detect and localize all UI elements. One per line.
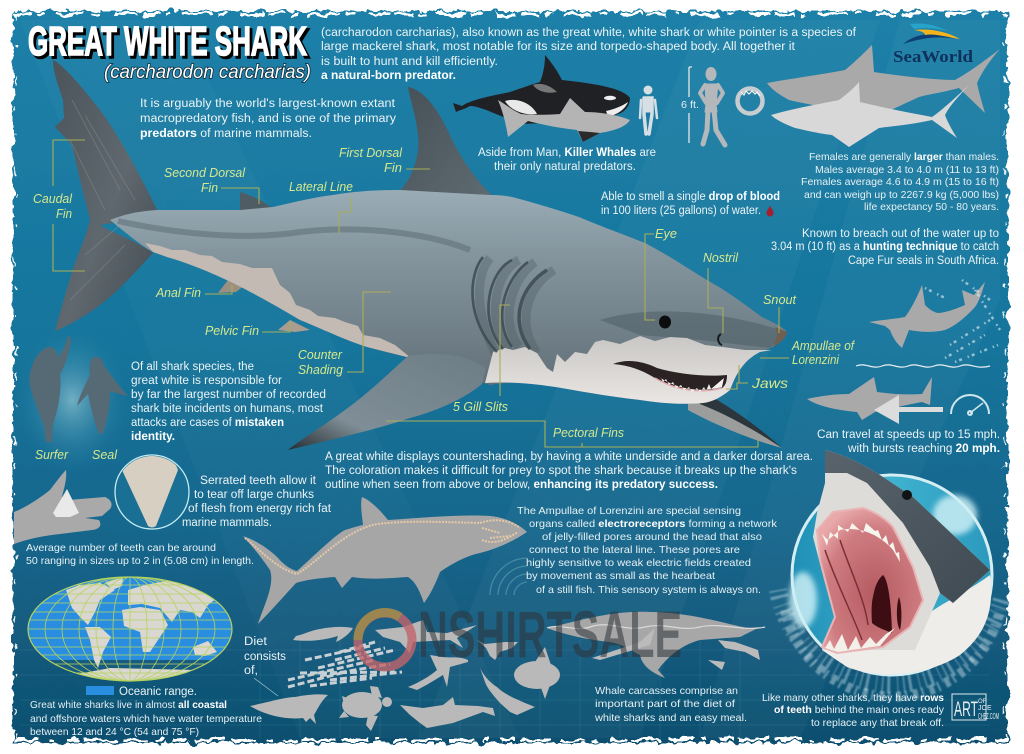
label: counter shading [298, 292, 391, 377]
mistaken identity text [131, 361, 326, 443]
range text [30, 699, 262, 738]
rows of teeth text [762, 692, 945, 729]
size text: Males average 3.4 to 4.0 m (11 to 13 ft) [815, 164, 999, 176]
artist logo: JOE [978, 705, 992, 712]
label: snout [763, 293, 797, 333]
label: jaws: Jaws [751, 375, 788, 391]
label: eye [645, 227, 677, 320]
mistaken identity text: identity. [131, 431, 175, 443]
watermark [358, 597, 682, 671]
whale text: Whale carcasses comprise an [595, 685, 738, 697]
artist logo: OF [978, 699, 987, 705]
label: pectoral fins [386, 421, 758, 447]
ampullae text: highly sensitive to weak electric fields created [526, 557, 751, 569]
lower teeth [825, 628, 895, 652]
label: snout: Snout [763, 293, 797, 307]
size text: Females average 4.6 to 4.9 m (15 to 16 ft) [801, 176, 999, 188]
killer whales text: Aside from Man, Killer Whales are [478, 147, 656, 159]
label: nostril [703, 251, 739, 333]
blood smell text: Able to smell a single drop of blood [601, 191, 780, 203]
teeth count text: 50 ranging in sizes up to 2 in (5.08 cm) in length. [26, 555, 254, 567]
label: first dorsal fin [339, 146, 430, 175]
label: second dorsal fin [164, 166, 259, 204]
diet text: consists [244, 651, 286, 663]
gill slits [472, 257, 547, 352]
mouth interior [817, 508, 923, 653]
mistaken identity text: great white is responsible for [131, 375, 282, 387]
map grid [20, 577, 240, 681]
teeth count text [26, 542, 254, 567]
intro text [321, 27, 857, 82]
sea lion right [480, 668, 535, 715]
label: ampullae of lorenzini: Lorenzini [792, 353, 840, 367]
world map [20, 577, 240, 684]
lateral line shadow [118, 221, 470, 250]
label: anal fin: Anal Fin [155, 286, 201, 300]
label: ampullae of lorenzini [760, 339, 855, 367]
artist logo: ART [954, 698, 978, 721]
label: eye: Eye [655, 227, 677, 241]
range text: Great white sharks live in almost all coastal [30, 699, 227, 711]
speed text [817, 429, 1000, 455]
icon: large person [700, 67, 725, 145]
whale text: white sharks and an easy meal. [594, 712, 747, 724]
turtle [339, 686, 392, 731]
diet text [244, 636, 286, 696]
ampullae text: organs called electroreceptors forming a network [529, 518, 778, 530]
label: first dorsal fin: Fin [384, 161, 402, 175]
rows of teeth text: of teeth behind the main ones ready [774, 704, 945, 716]
icon: blood drop [766, 206, 774, 217]
speed shark icon [807, 377, 932, 420]
ampullae text [517, 505, 778, 596]
macropredatory text: predators of marine mammals. [140, 128, 312, 140]
shark in front of orca [498, 98, 630, 142]
comparison silhouette: gray shark [767, 45, 1000, 115]
size text: Females are generally larger than males. [809, 151, 999, 163]
serrated teeth text: Serrated teeth allow it [200, 475, 317, 487]
logo: SeaWorld: SeaWorld [893, 47, 974, 66]
icon: shark jaws [738, 88, 762, 114]
ampullae text: of jelly-filled pores around the head that also [542, 531, 762, 543]
watermark: NSHIRTSALE [418, 597, 682, 671]
range text: and offshore waters which have water temperature [30, 713, 262, 725]
orca and shark illustration [453, 55, 630, 142]
arrow [874, 395, 943, 424]
countershading text [325, 451, 813, 491]
breaching shark icon [856, 280, 1000, 367]
size text: life expectancy 50 - 80 years. [864, 201, 999, 213]
ampullae text: connect to the lateral line. These pores are [529, 544, 740, 556]
label: surfer and seal [35, 448, 118, 462]
label: counter shading: Counter [298, 348, 343, 362]
dugong [250, 694, 328, 724]
open-mouth shark illustration [778, 450, 1002, 697]
electric field arcs [490, 558, 527, 595]
labels: shark anatomy [33, 140, 855, 447]
serrated teeth text: to tear off large chunks [194, 489, 314, 501]
ampullae text: by movement as small as the hearbeat [526, 570, 715, 582]
mistaken identity text: shark bite incidents on humans, most [131, 403, 324, 415]
shark small [375, 620, 477, 653]
circle background [792, 475, 992, 675]
belly countershading [145, 243, 411, 358]
diet text: Diet [244, 636, 268, 648]
nostril [718, 334, 722, 345]
icon: hand holding tooth [14, 470, 112, 544]
splash inside circle [789, 495, 977, 628]
label: nostril: Nostril [703, 251, 739, 265]
label: first dorsal fin: First Dorsal [339, 146, 403, 160]
label: counter shading: Shading [298, 363, 343, 377]
upper teeth [822, 523, 900, 562]
dolphin [400, 697, 495, 728]
breach text: Cape Fur seals in South Africa. [848, 255, 999, 267]
label: caudal fin [33, 140, 85, 271]
head [813, 450, 990, 650]
comparison silhouette: white shark [771, 82, 969, 147]
killer whales text [478, 147, 656, 173]
eye [902, 490, 912, 500]
water splash [778, 590, 1002, 697]
label: caudal fin: Caudal [33, 192, 73, 206]
mistaken identity text: by far the largest number of recorded [131, 389, 326, 401]
blood smell text [601, 191, 780, 217]
continents [66, 578, 222, 684]
gill shading [479, 258, 554, 368]
teeth count text: Average number of teeth can be around [26, 542, 216, 554]
serrated teeth text: of flesh from energy rich fat [188, 503, 332, 515]
body [110, 190, 787, 404]
sea lion [408, 655, 468, 690]
countershading text: A great white displays countershading, by having a white underside and a darker dorsal area. [325, 451, 813, 463]
title: GREAT WHITE SHARK [28, 18, 307, 64]
main shark illustration [53, 60, 787, 450]
macropredatory text [140, 98, 396, 140]
intro text: (carcharodon carcharias), also known as the great white, white shark or white pointer is a species of [321, 27, 857, 39]
label: second dorsal fin: Second Dorsal [164, 166, 246, 180]
label: anal fin [155, 285, 232, 300]
icon: speedometer [951, 395, 989, 415]
ampullae text: of a still fish. This sensory system is always on. [536, 584, 761, 596]
fish school [288, 642, 402, 687]
breach text [771, 228, 999, 267]
pectoral fin [288, 354, 486, 450]
label: pelvic fin: Pelvic Fin [205, 324, 259, 338]
orca [453, 55, 630, 124]
gum ridge [825, 540, 868, 640]
killer whales text: their only natural predators. [494, 161, 636, 173]
intro text: is built to hunt and kill efficiently. [321, 56, 498, 68]
eye [659, 316, 671, 328]
serrated teeth text: marine mammals. [182, 517, 272, 529]
breach text: Known to breach out of the water up to [802, 228, 999, 240]
label: caudal fin: Fin [56, 207, 72, 221]
speed text: Can travel at speeds up to 15 mph. [817, 429, 1000, 441]
rows of teeth text: to replace any that break off. [811, 717, 944, 729]
intro text: large mackerel shark, most notable for its size and torpedo-shaped body. All together it [321, 41, 796, 53]
logo: SeaWorld [893, 23, 974, 66]
seal silhouette [77, 357, 128, 434]
blood smell text: in 100 liters (25 gallons) of water. [601, 205, 761, 217]
range text: between 12 and 24 °C (54 and 75 °F) [30, 726, 199, 738]
label: pectoral fins: Pectoral Fins [553, 426, 624, 440]
countershading text: outline when seen from above or below, enhancing its predatory success. [325, 479, 718, 491]
subtitle: (carcharodon carcharias) [104, 62, 311, 83]
pelvic fin [278, 320, 310, 332]
small sharks around whale [592, 628, 760, 670]
far pectoral fin [688, 397, 782, 448]
anal fin [218, 280, 245, 293]
speed text: with bursts reaching 20 mph. [847, 443, 1000, 455]
mistaken identity text: Of all shark species, the [131, 361, 254, 373]
dark band from eye to snout [600, 311, 787, 348]
macropredatory text: It is arguably the world's largest-known extant [140, 98, 396, 110]
map legend: Oceanic range. [119, 686, 197, 698]
label: second dorsal fin: Fin [201, 181, 218, 195]
upper dark skin [825, 450, 990, 603]
fin streaks [70, 100, 135, 300]
icon: serrated tooth in circle [115, 455, 189, 529]
whale text [594, 685, 747, 724]
height scale [681, 67, 699, 143]
breach text: 3.04 m (10 ft) as a hunting technique to catch [771, 241, 999, 253]
second dorsal fin [240, 192, 272, 211]
diet text: of, [244, 665, 258, 677]
label: lateral line [289, 180, 353, 233]
sunfish [514, 647, 560, 699]
label: surfer and seal: Surfer [35, 448, 69, 462]
snout tip [773, 327, 787, 347]
mistaken identity text: attacks are cases of mistaken [131, 417, 284, 429]
intro text: a natural-born predator. [321, 70, 456, 82]
label: ampullae of lorenzini: Ampullae of [791, 339, 855, 353]
head white underside [485, 336, 772, 404]
label: gill slits [453, 305, 510, 414]
teeth [658, 376, 724, 392]
height scale: 6 ft. [681, 99, 699, 111]
macropredatory text: macropredatory fish, and is one of the primary [140, 113, 396, 125]
whale carcass [547, 612, 765, 678]
label: lateral line: Lateral Line [289, 180, 353, 194]
throat [872, 575, 892, 633]
label: gill slits: 5 Gill Slits [453, 400, 508, 414]
surfer silhouette [30, 336, 71, 442]
seabird [477, 640, 518, 660]
whale text: important part of the diet of [595, 698, 735, 710]
title: GREAT WHITE SHARK [30, 20, 310, 66]
serrated teeth text [182, 475, 332, 529]
countershading text: The coloration makes it difficult for prey to spot the shark because it breaks up the shark's [325, 465, 797, 477]
diet silhouettes [250, 620, 560, 731]
label: jaws [726, 365, 788, 391]
ampullae text: The Ampullae of Lorenzini are special sensing [517, 505, 741, 517]
caudal fin [53, 60, 158, 331]
text: CHEZ.COM [978, 712, 999, 721]
rows of teeth text: Like many other sharks, they have rows [762, 692, 944, 704]
foam under head [822, 575, 991, 674]
first dorsal fin [400, 87, 495, 198]
size text: and can weigh up to 2267.9 kg (5,000 lbs) [804, 189, 999, 201]
ampullae shark diagram [243, 497, 527, 624]
mouth [613, 361, 727, 392]
icon: small person [640, 86, 657, 134]
label: surfer and seal: Seal [92, 448, 118, 462]
label: pelvic fin [205, 322, 290, 338]
size text [801, 151, 999, 213]
small dolphin left [293, 627, 353, 642]
title [28, 18, 310, 66]
